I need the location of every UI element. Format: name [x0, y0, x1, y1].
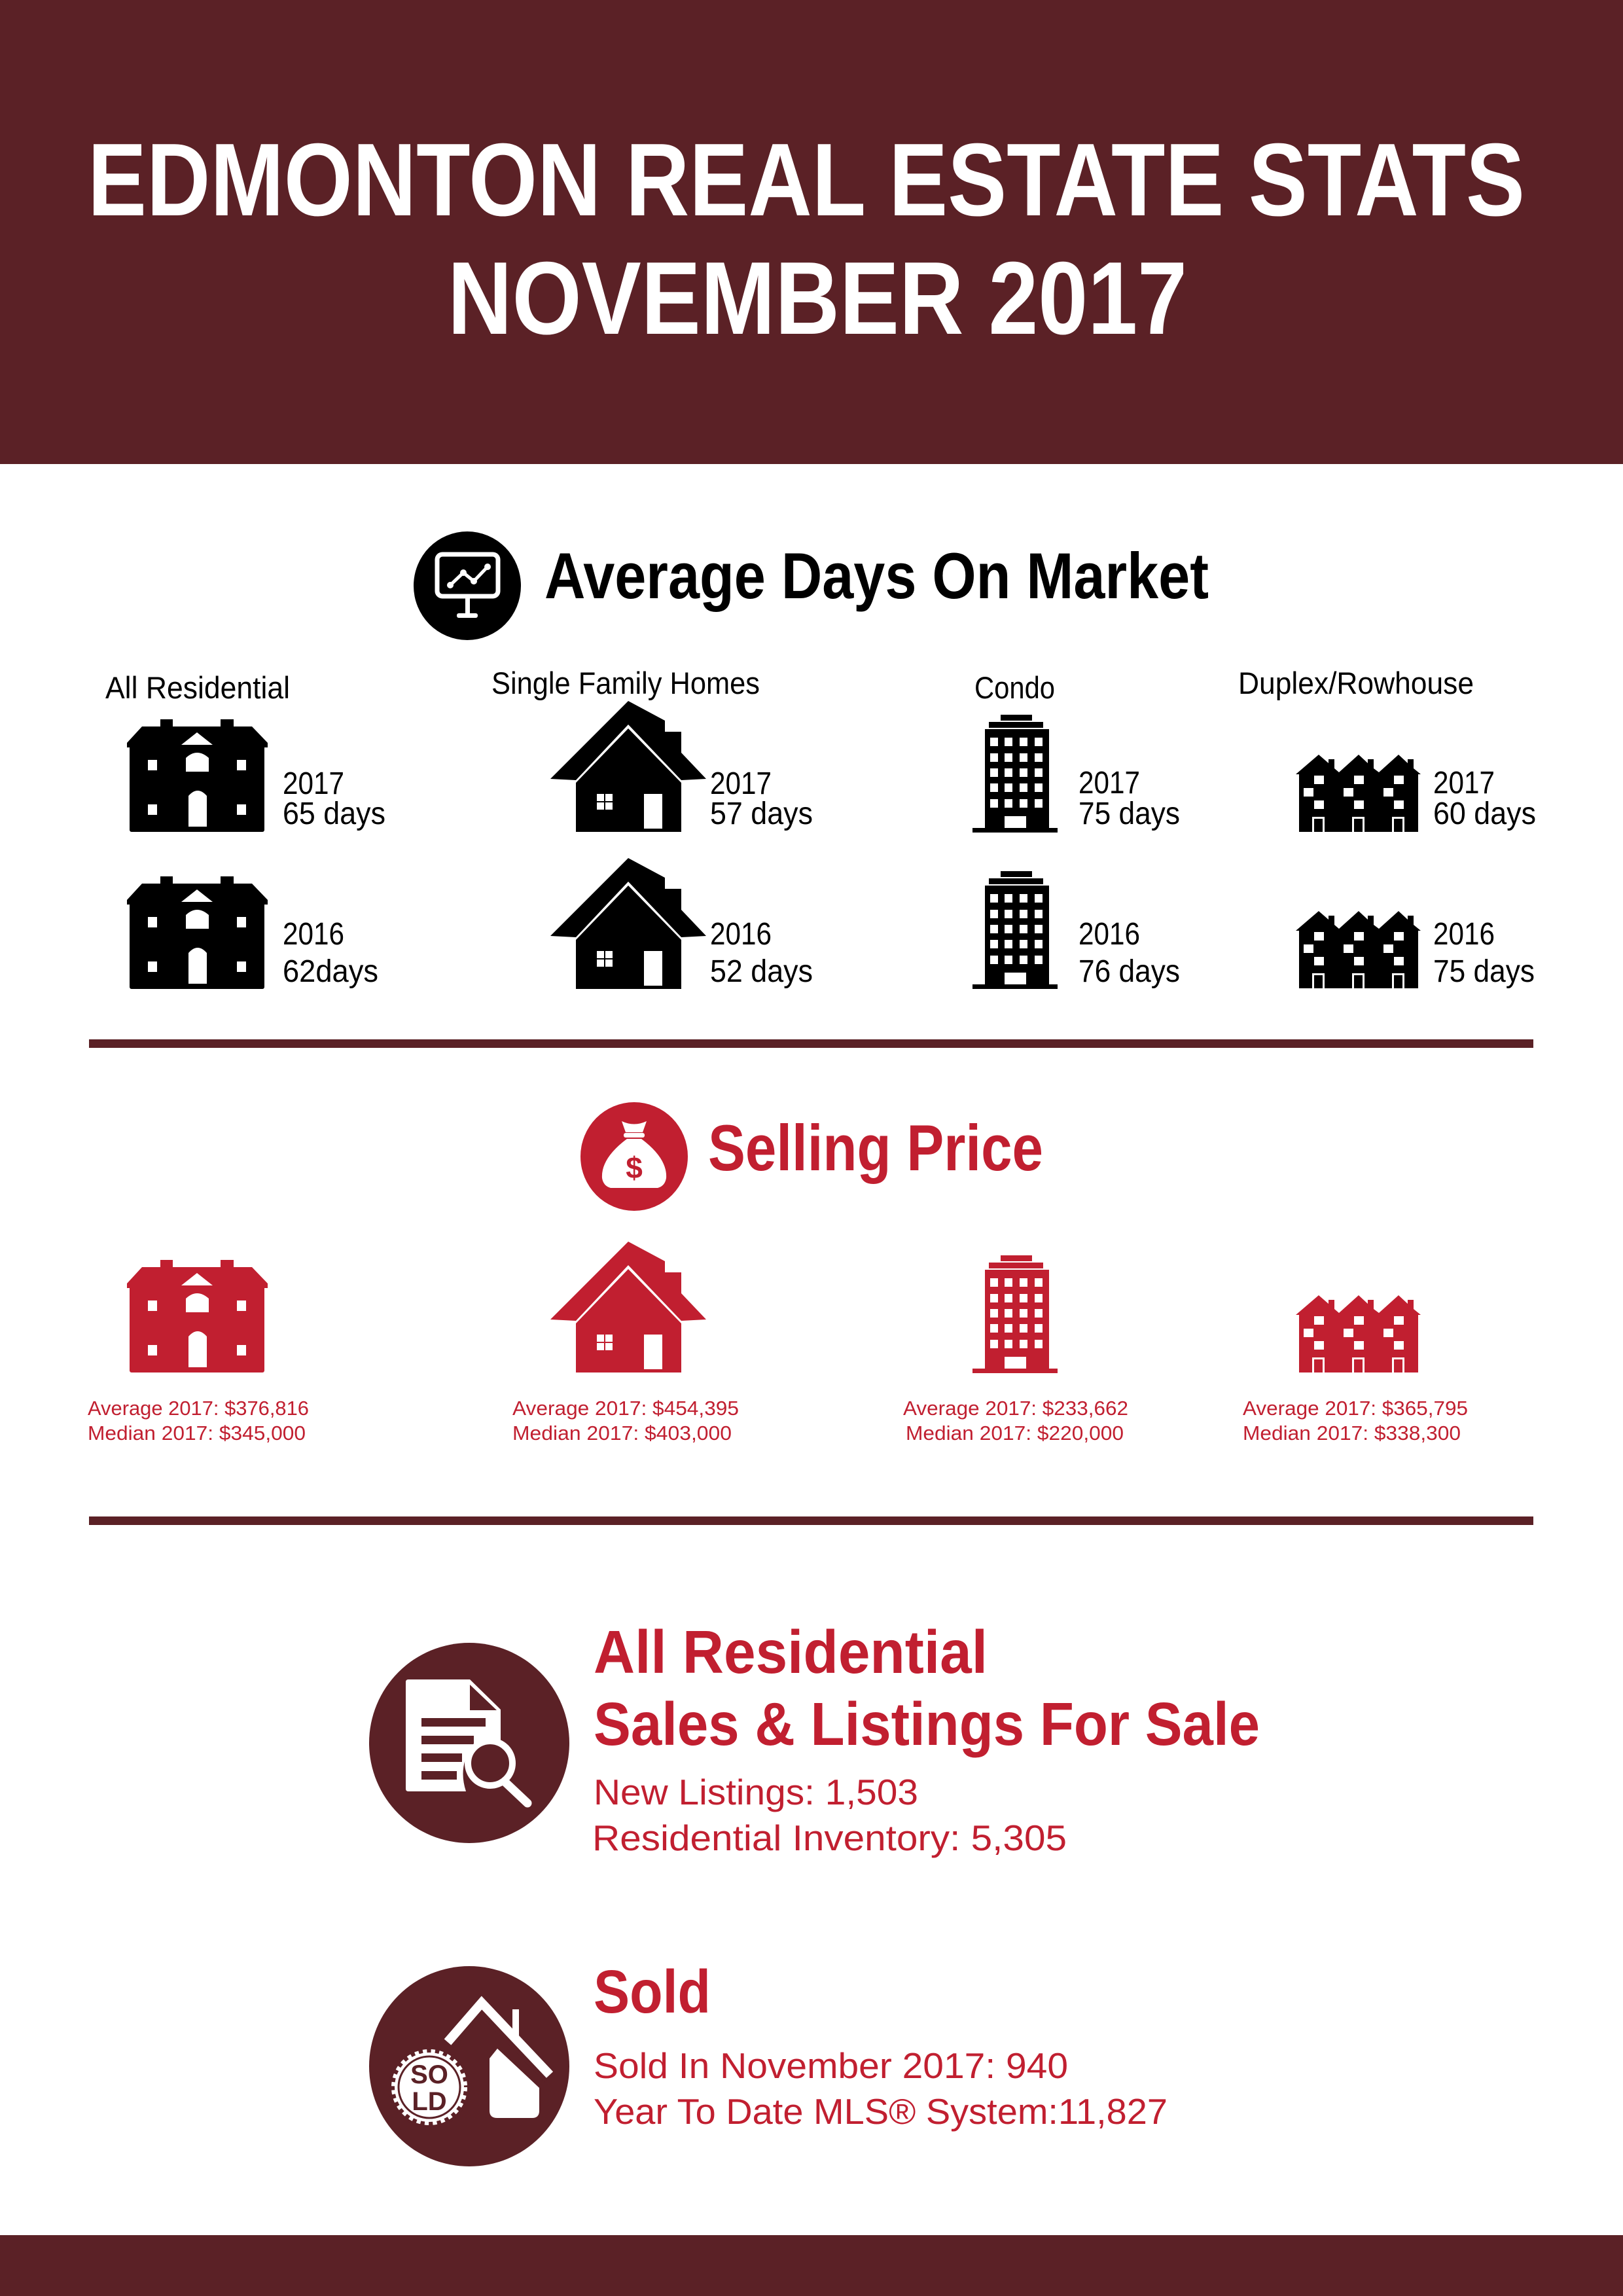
- heading: all residential sales & listings: Sales & Listings For Sale: [594, 1690, 1260, 1758]
- price values: Median 2017: $403,000: [512, 1422, 732, 1444]
- heading: average days on market: Average Days On Market: [544, 539, 1209, 612]
- days values: 2017: [710, 766, 772, 801]
- price values: [88, 1397, 1468, 1444]
- days values: 2017: [1433, 766, 1495, 800]
- price values: Median 2017: $345,000: [88, 1422, 306, 1444]
- listing stats: New Listings: 1,503: [594, 1772, 918, 1812]
- sold stats: [594, 2045, 1168, 2132]
- days values: 62days: [283, 954, 378, 989]
- price values: Average 2017: $376,816: [88, 1397, 309, 1420]
- days values: 60 days: [1433, 797, 1536, 831]
- icon: sold house: [369, 1966, 569, 2166]
- icons: red buildings: [127, 1242, 1421, 1373]
- title: [88, 122, 1525, 356]
- section: selling price: [88, 1102, 1468, 1444]
- price values: Average 2017: $454,395: [512, 1397, 739, 1420]
- column labels: [105, 666, 1474, 705]
- icon: document with magnifier: [369, 1643, 569, 1843]
- days values: 76 days: [1079, 954, 1180, 989]
- days values: [283, 766, 1536, 989]
- header banner: [0, 0, 1623, 464]
- column labels: Single Family Homes: [491, 666, 760, 700]
- price values: Median 2017: $338,300: [1243, 1422, 1461, 1444]
- section: listings: [369, 1618, 1260, 1858]
- days values: 2017: [283, 766, 344, 801]
- days values: 52 days: [710, 954, 813, 989]
- icon: chart monitor: [414, 531, 521, 640]
- section: average days on market: [105, 531, 1536, 989]
- price values: Average 2017: $233,662: [903, 1397, 1128, 1420]
- heading: all residential sales & listings: [594, 1618, 1260, 1758]
- icons: black buildings: [127, 701, 1421, 989]
- sold stats: Sold In November 2017: 940: [594, 2045, 1068, 2086]
- title: NOVEMBER 2017: [448, 241, 1187, 356]
- icon: sold house: SO: [410, 2060, 448, 2089]
- heading: all residential sales & listings: All Residential: [594, 1618, 988, 1686]
- column labels: Duplex/Rowhouse: [1238, 666, 1474, 700]
- heading: selling price: Selling Price: [708, 1111, 1043, 1184]
- column labels: Condo: [974, 670, 1055, 705]
- heading: sold: Sold: [594, 1958, 711, 2026]
- icon: money bag: $: [626, 1151, 643, 1185]
- price values: Median 2017: $220,000: [906, 1422, 1124, 1444]
- section: sold: [369, 1958, 1168, 2166]
- days values: 57 days: [710, 797, 813, 831]
- sold stats: Year To Date MLS® System:11,827: [594, 2091, 1168, 2132]
- days values: 2016: [1079, 917, 1140, 952]
- days values: 2017: [1079, 766, 1140, 800]
- days values: 2016: [710, 917, 772, 952]
- icon: money bag: [580, 1102, 688, 1211]
- days values: 2016: [1433, 917, 1495, 952]
- price values: Average 2017: $365,795: [1243, 1397, 1468, 1420]
- days values: 75 days: [1433, 954, 1535, 989]
- column labels: All Residential: [105, 670, 290, 705]
- days values: 2016: [283, 917, 344, 952]
- listing stats: Residential Inventory: 5,305: [592, 1818, 1067, 1858]
- icon: sold house: LD: [412, 2087, 447, 2116]
- days values: 65 days: [283, 797, 385, 831]
- days values: 75 days: [1079, 797, 1180, 831]
- footer band: [0, 2235, 1623, 2296]
- listing stats: [592, 1772, 1067, 1858]
